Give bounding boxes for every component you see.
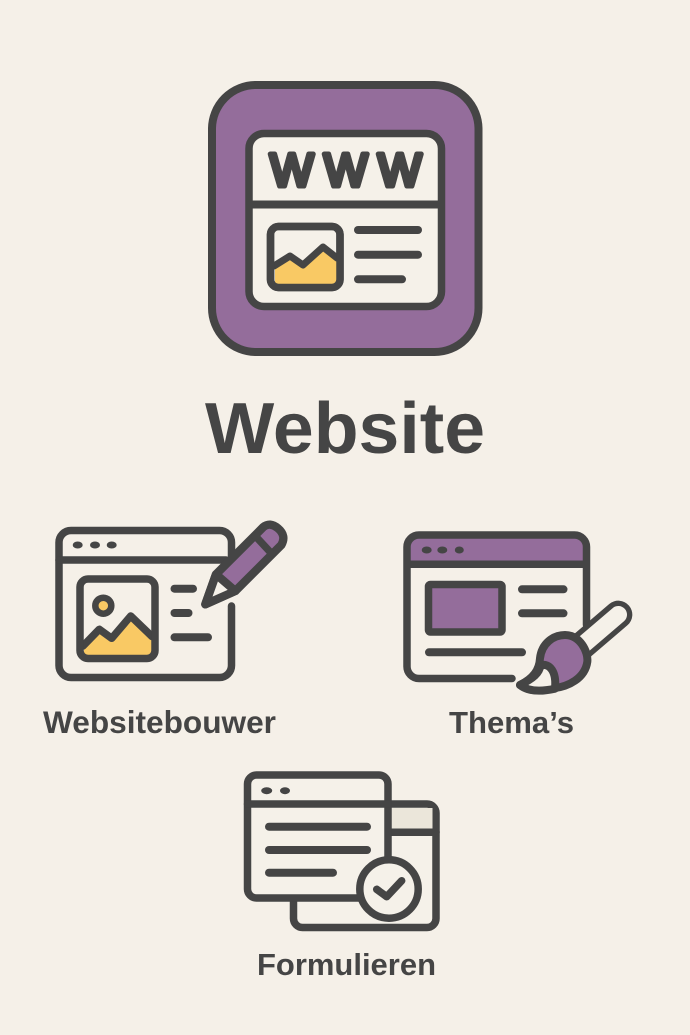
title: Website: [205, 389, 485, 469]
icon: thema's: [407, 535, 618, 691]
label: websitebouwer: Websitebouwer: [43, 704, 276, 740]
icon: main website window: [212, 85, 478, 352]
browser window: [249, 134, 442, 306]
image thumbnail: [270, 226, 340, 288]
icon: websitebouwer: [59, 525, 283, 678]
form lines: [269, 827, 367, 873]
window dots: [73, 542, 117, 548]
purple content block: [428, 584, 502, 632]
icon: formulieren: [248, 775, 436, 928]
icon: paint brush: [520, 615, 618, 691]
check badge: [360, 860, 418, 918]
text lines: [358, 230, 418, 279]
text lines: [174, 589, 208, 637]
browser window: [407, 535, 586, 678]
front window: [248, 775, 388, 898]
back window: [294, 804, 436, 928]
browser window: [59, 530, 232, 678]
icon: pencil: [205, 525, 283, 604]
text lines: [429, 589, 564, 652]
www label: WWW: [270, 144, 422, 196]
purple header: [407, 535, 586, 564]
label: thema's: Thema’s: [449, 705, 574, 740]
purple rounded tile: [212, 85, 478, 352]
label: formulieren: Formulieren: [257, 947, 436, 982]
image placeholder: [80, 579, 155, 658]
window dots: [422, 546, 464, 554]
